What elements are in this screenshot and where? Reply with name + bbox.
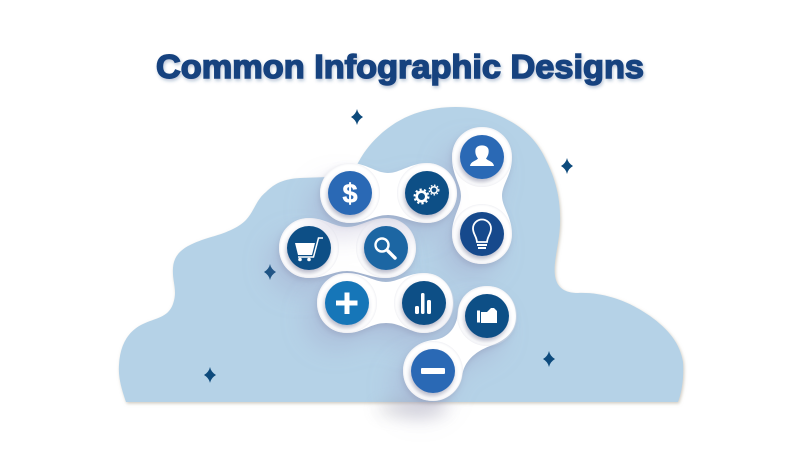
icon: plus [317,273,377,333]
icon: cart [279,218,339,278]
icon: magnifier [356,218,416,278]
icon: person [452,127,512,187]
connector: cart and search [279,218,416,278]
sparkle stars [204,109,573,383]
icon: bar chart [394,273,454,333]
title: Common Infographic Designs [156,48,644,85]
shadow under minus connector [376,401,448,417]
connector: folder and minus [403,286,516,401]
icon: dollar: $ [342,178,358,208]
cloud background shape [119,107,683,402]
connector: person and bulb [452,127,512,264]
icon: light bulb [452,204,512,264]
connector: dollar and gears [320,163,457,223]
icon: folder [457,286,517,346]
icon: dollar [320,163,380,223]
icon: gears [397,163,457,223]
connector: plus and bars [317,273,453,333]
icon: minus [403,341,463,401]
